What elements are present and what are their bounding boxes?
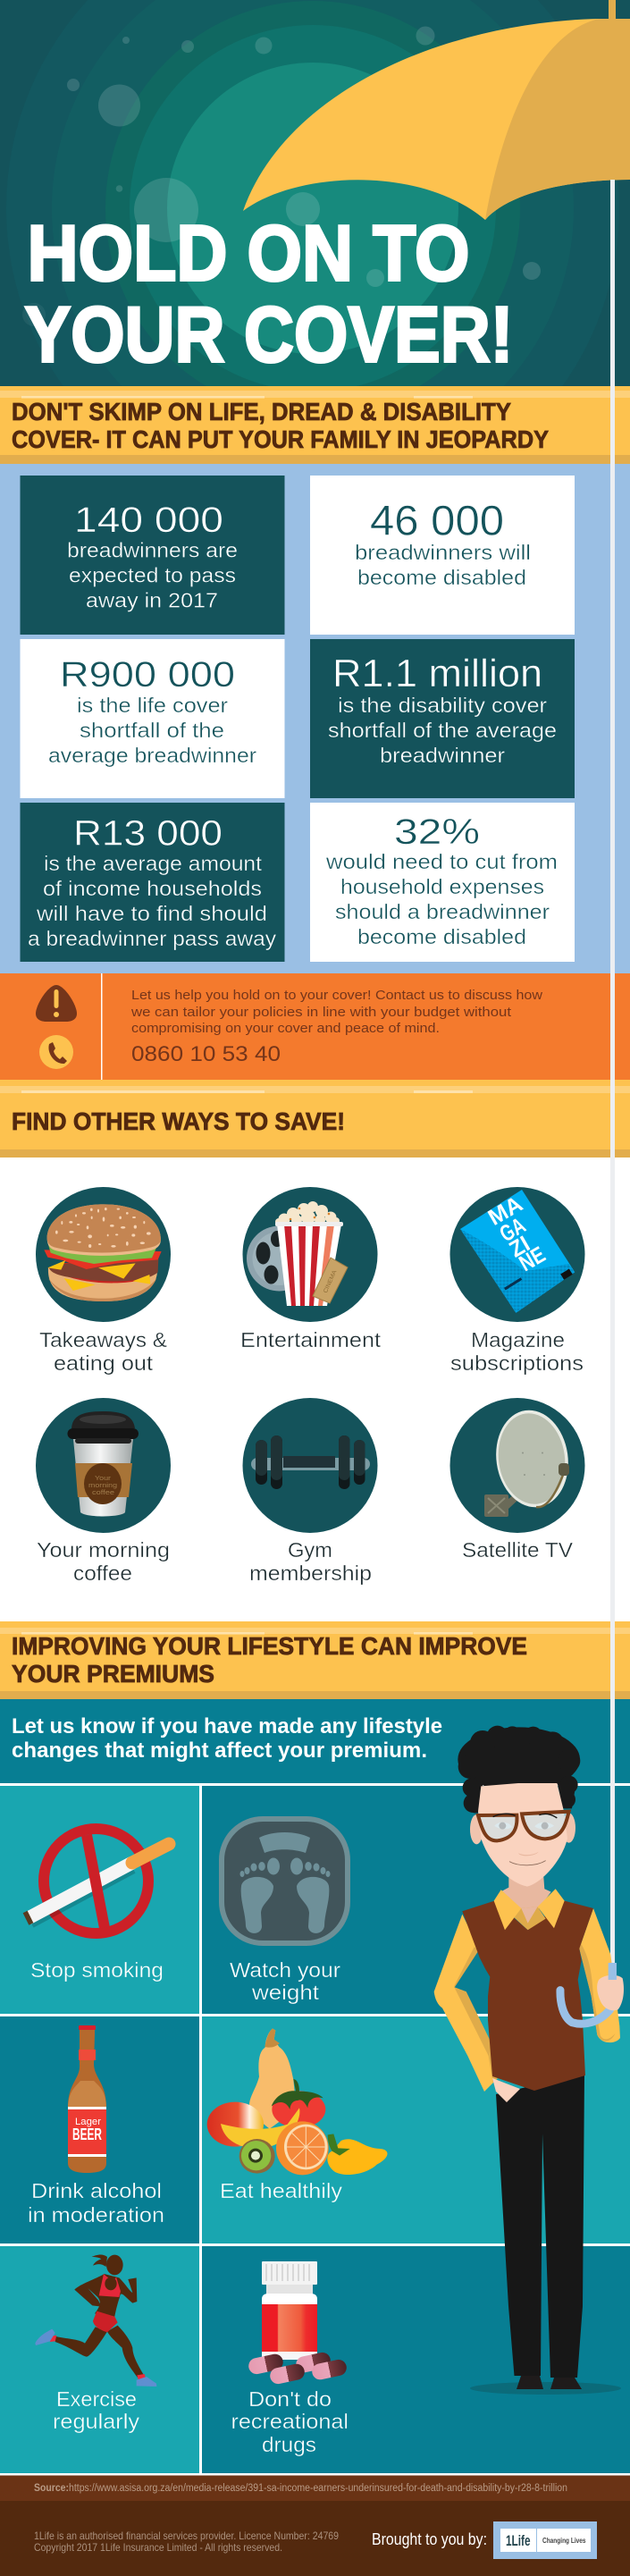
label: watch your weight: Watch your [230, 1958, 340, 1982]
stat: 32% [310, 803, 575, 962]
call to action text: compromising on your cover and peace of mind. [131, 1021, 440, 1036]
label: recreational drugs: recreational [231, 2410, 349, 2433]
stat: 140 000 [20, 476, 284, 635]
label: eat healthily: Eat healthily [220, 2179, 343, 2202]
call to action text: we can tailor your policies in line with your budget without [130, 1005, 512, 1020]
item: gym membership [243, 1398, 377, 1585]
icon: phone [39, 1035, 73, 1069]
ears [470, 1813, 575, 1844]
source bar [0, 2476, 630, 2501]
hair [458, 1726, 580, 1813]
stat: 46 000: become disabled [357, 566, 526, 589]
label: recreational drugs: Don't do [248, 2387, 332, 2411]
icon: dumbbell [251, 1435, 370, 1489]
call to action text: 0860 10 53 40 [131, 1042, 281, 1066]
upper body [434, 1726, 624, 2102]
item: morning coffee [36, 1398, 171, 1585]
label: takeaways: eating out [54, 1351, 154, 1375]
icon: runner [35, 2254, 156, 2387]
shirt collar [494, 1889, 565, 1930]
legal text: 1Life is an authorised financial services provider. Licence Number: 24769 [34, 2530, 339, 2542]
label: recreational drugs: drugs [262, 2433, 316, 2456]
stat: 140 000: breadwinners are [67, 538, 238, 561]
heading band: find other ways to save: FIND OTHER WAYS TO SAVE! [12, 1107, 345, 1135]
stat: R900 000: average breadwinner [48, 744, 256, 767]
label: drink alcohol: in moderation [28, 2203, 164, 2227]
stat: 46 000: breadwinners will [355, 541, 531, 564]
shoes [517, 2376, 582, 2389]
item: satellite TV [450, 1398, 584, 1562]
item: takeaways [36, 1187, 171, 1375]
heading band: improving your lifestyle: IMPROVING YOUR LIFESTYLE CAN IMPROVE [12, 1632, 527, 1660]
icon: fruit and vegetables [207, 2028, 387, 2175]
stat: R13 000 [20, 803, 284, 962]
icon: magazine: NE [515, 1242, 550, 1276]
label: morning coffee: coffee [73, 1562, 132, 1585]
icon: burger [44, 1204, 162, 1301]
intro text: Let us know if you have made any lifestyle [12, 1714, 442, 1738]
footer [0, 2501, 630, 2576]
label: drink alcohol: Drink alcohol [31, 2179, 162, 2202]
item: magazine subscriptions [450, 1187, 584, 1375]
face [478, 1783, 567, 1887]
tip: eat healthily [207, 2028, 387, 2202]
icon: popcorn and film reel [247, 1201, 348, 1306]
stat: R13 000: of income households [43, 877, 262, 900]
stat: 140 000: 140 000 [74, 501, 223, 540]
right arm [579, 1908, 620, 2042]
call to action text: Let us help you hold on to your cover! Contact us to discuss how [131, 988, 542, 1003]
logo: 1Life [506, 2532, 531, 2549]
icon: cinema ticket: CINEMA [323, 1269, 339, 1294]
heading band: improving your lifestyle [0, 1621, 630, 1699]
stat: R13 000: a breadwinner pass away [28, 927, 277, 950]
tip: watch your weight [222, 1819, 348, 2004]
icon: magazine: MA [484, 1191, 527, 1231]
label: gym membership: membership [249, 1562, 372, 1585]
stat: 32%: 32% [394, 812, 480, 852]
mouth [509, 1861, 546, 1865]
label: satellite TV: Satellite TV [462, 1538, 574, 1562]
heading band: don't skimp: COVER- IT CAN PUT YOUR FAMILY IN JEOPARDY [12, 425, 549, 453]
umbrella pole [610, 180, 615, 1963]
stat: R13 000: R13 000 [73, 813, 223, 853]
icon: satellite dish [484, 1405, 575, 1517]
label: morning coffee: Your morning [37, 1538, 170, 1562]
heading band: don't skimp: DON'T SKIMP ON LIFE, DREAD & DISABILITY [12, 398, 511, 425]
brought to you by: Brought to you by: [372, 2530, 487, 2548]
sweater vest [462, 1901, 593, 2091]
tip: exercise regularly [35, 2254, 156, 2433]
icon: coffee cup: morning [88, 1483, 117, 1489]
label: gym membership [249, 1538, 372, 1585]
glasses [478, 1812, 569, 1840]
label: magazine subscriptions: subscriptions [450, 1351, 584, 1375]
logo: Changing Lives [542, 2537, 586, 2545]
heading band: find other ways to save [0, 1080, 630, 1158]
umbrella handle [609, 1963, 617, 1980]
icon: beer bottle: Lager [75, 2117, 101, 2127]
stat: 32%: would need to cut from [325, 850, 558, 873]
stat: R900 000: shortfall of the [80, 719, 224, 742]
label: watch your weight [230, 1958, 340, 2004]
panel: statistics [0, 464, 630, 973]
label: takeaways [39, 1328, 167, 1375]
item: entertainment [240, 1187, 382, 1351]
label: exercise regularly: regularly [53, 2410, 140, 2433]
intro text: changes that might affect your premium. [12, 1738, 427, 1763]
logo [493, 2521, 597, 2559]
trousers [496, 2074, 584, 2378]
stat: 32%: become disabled [357, 925, 526, 948]
label: magazine subscriptions: Magazine [471, 1328, 565, 1351]
label: gym membership: Gym [288, 1538, 332, 1562]
label: magazine subscriptions [450, 1328, 584, 1375]
icon: magazine [460, 1190, 575, 1313]
stat: 46 000: 46 000 [370, 497, 504, 543]
label: exercise regularly [53, 2387, 140, 2433]
stat: 32%: should a breadwinner [335, 900, 550, 923]
tip: drink in moderation [28, 2025, 164, 2227]
label: takeaways: Takeaways & [39, 1328, 167, 1351]
stat: 46 000 [310, 476, 575, 635]
stat: 140 000: expected to pass [69, 563, 236, 586]
panel: lifestyle [0, 1699, 630, 2476]
stat: R13 000: will have to find should [36, 902, 267, 925]
holding hand [597, 1975, 624, 2010]
nose [518, 1852, 539, 1856]
eyes [494, 1823, 554, 1830]
icon: coffee cup: Your [95, 1476, 112, 1482]
stat: R900 000: R900 000 [60, 655, 235, 695]
heading band: don't skimp [0, 386, 630, 464]
icon: umbrella canopy [243, 0, 630, 220]
stat: R1.1 million: breadwinner [380, 744, 505, 767]
label: exercise regularly: Exercise [56, 2387, 137, 2411]
source bar: Source: [34, 2483, 69, 2494]
icon: magazine: ZI [505, 1232, 534, 1263]
stat: R900 000: is the life cover [77, 694, 228, 717]
tip: no recreational drugs [231, 2261, 349, 2456]
stat: R13 000: is the average amount [44, 852, 263, 875]
label: stop smoking: Stop smoking [30, 1958, 164, 1982]
stat: 140 000: away in 2017 [86, 588, 218, 611]
label: drink alcohol [28, 2179, 164, 2227]
icon: beer bottle [68, 2025, 106, 2173]
neck and collar [500, 1877, 551, 1924]
stat: R1.1 million: is the disability cover [338, 694, 547, 717]
source bar: https://www.asisa.org.za/en/media-release/391-sa-income-earners-underinsured-for-death-and-disability-by-r28-8-trillion [69, 2483, 567, 2494]
shadow [470, 2382, 621, 2395]
panel: call to action [0, 973, 630, 1080]
icon: pill bottle [248, 2261, 348, 2386]
stat: R1.1 million: R1.1 million [332, 652, 542, 695]
tip: stop smoking [26, 1829, 169, 1982]
intro text [12, 1714, 442, 1763]
title: HOLD ON TO [27, 209, 470, 297]
legal text [34, 2530, 339, 2554]
icon: coffee cup: coffee [92, 1490, 114, 1496]
icon: no smoking [26, 1829, 169, 1933]
title [25, 209, 513, 379]
heading band: improving your lifestyle: YOUR PREMIUMS [12, 1660, 214, 1688]
umbrella hook [560, 1991, 610, 2024]
stat: R1.1 million: shortfall of the average [328, 719, 557, 742]
label: entertainment: Entertainment [240, 1328, 382, 1351]
legal text: Copyright 2017 1Life Insurance Limited - All rights reserved. [34, 2541, 282, 2554]
left arm [434, 1915, 502, 2092]
icon: magazine: GA [496, 1213, 530, 1247]
title: YOUR COVER! [25, 290, 513, 379]
label: recreational drugs [231, 2387, 349, 2456]
call to action text [130, 988, 542, 1066]
icon: warning drop [36, 985, 77, 1022]
label: watch your weight: weight [251, 1981, 320, 2004]
icon: bathroom scale [222, 1819, 348, 1943]
stat: R1.1 million [310, 639, 575, 798]
icon: beer bottle: BEER [72, 2126, 102, 2143]
stat: R900 000 [20, 639, 284, 798]
label: morning coffee [37, 1538, 170, 1585]
icon: coffee cup [68, 1411, 139, 1516]
pocket hand [492, 2078, 520, 2102]
stat: 32%: household expenses [340, 875, 544, 898]
hero panel [0, 0, 630, 515]
illustration: man holding umbrella [434, 1726, 624, 2395]
panel: ways to save [0, 1158, 630, 1621]
